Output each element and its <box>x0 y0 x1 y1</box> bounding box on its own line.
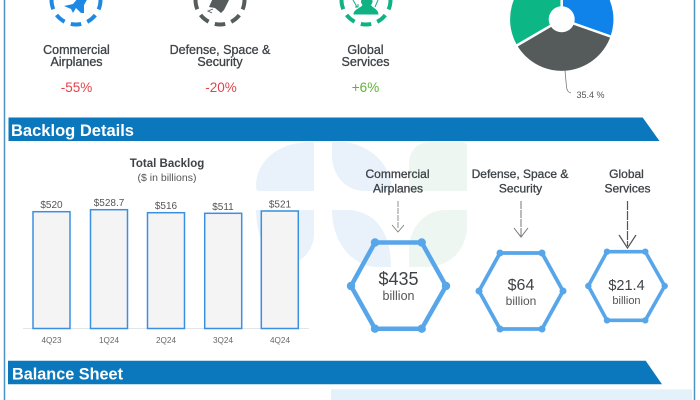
bar: 4Q24: $521 <box>269 200 292 210</box>
value: $64 <box>508 277 534 294</box>
value: $435 <box>378 269 419 289</box>
bar: 4Q23: 4Q23 <box>41 336 62 345</box>
label: global services: Services <box>342 55 389 69</box>
label: defense, space and security <box>170 43 271 69</box>
bar: 4Q23 <box>33 200 70 345</box>
icon: global services <box>337 0 395 29</box>
hexagon <box>476 250 566 332</box>
bar: 3Q24 <box>205 202 242 345</box>
chart title: Total Backlog <box>130 158 204 170</box>
bar: 4Q23: $520 <box>40 200 63 211</box>
arrow <box>392 201 404 232</box>
bar chart: total backlog <box>23 158 309 345</box>
arrow <box>619 201 636 248</box>
label: global services: Global <box>347 43 384 57</box>
segment title: Commercial <box>365 167 430 181</box>
backlog segment: commercial airplanes: billion <box>383 289 415 303</box>
label: commercial airplanes: Commercial <box>43 43 110 57</box>
bar: 2Q24 <box>148 201 184 345</box>
label: commercial airplanes <box>43 43 110 69</box>
backlog segment: defense, space and security <box>472 167 568 332</box>
watermark logo <box>256 142 467 267</box>
value: -20%: -20% <box>205 80 237 95</box>
value: +6%: +6% <box>352 80 379 95</box>
bar: 1Q24: 1Q24 <box>99 336 119 345</box>
segment title: Airplanes <box>373 182 423 196</box>
bar: 2Q24: 2Q24 <box>156 336 176 345</box>
bar: 3Q24: $511 <box>212 202 234 213</box>
heading: backlog details <box>8 118 660 141</box>
pie leader line <box>565 70 571 93</box>
heading: balance sheet <box>8 361 662 384</box>
heading: backlog details: Backlog Details <box>11 121 134 140</box>
label: defense, space and security: Security <box>197 55 243 69</box>
hexagon <box>585 248 668 323</box>
segment title: Global <box>609 167 644 181</box>
chart subtitle: ($ in billions) <box>138 172 196 184</box>
backlog segment: global services <box>585 167 668 323</box>
label: global services <box>342 43 389 69</box>
pie value label: 35.4 % <box>576 90 605 100</box>
value: $21.4 <box>608 278 645 294</box>
backlog segment: commercial airplanes <box>347 167 450 333</box>
backlog segment: global services: billion <box>612 295 641 307</box>
light panel <box>331 389 692 400</box>
heading: balance sheet: Balance Sheet <box>12 364 123 384</box>
bar: 1Q24: $528.7 <box>94 198 125 209</box>
segment title: Services <box>604 182 651 196</box>
value: -55%: -55% <box>61 80 92 95</box>
label: commercial airplanes: Airplanes <box>50 55 103 69</box>
icon: defense rocket <box>191 0 249 29</box>
segment title: Security <box>499 182 542 196</box>
label: defense, space and security: Defense, Space & <box>170 43 271 57</box>
backlog segment: defense, space and security: billion <box>506 294 536 308</box>
hexagon <box>347 238 450 333</box>
bar: 2Q24: $516 <box>155 201 178 212</box>
bar: 3Q24: 3Q24 <box>213 336 233 345</box>
segment title: Defense, Space & <box>472 167 568 181</box>
bar: 4Q24: 4Q24 <box>270 336 290 345</box>
pie chart <box>510 0 613 100</box>
arrow <box>514 201 528 237</box>
bar: 1Q24 <box>90 198 128 345</box>
icon: commercial airplanes <box>47 0 105 29</box>
bar: 4Q24 <box>261 200 298 345</box>
